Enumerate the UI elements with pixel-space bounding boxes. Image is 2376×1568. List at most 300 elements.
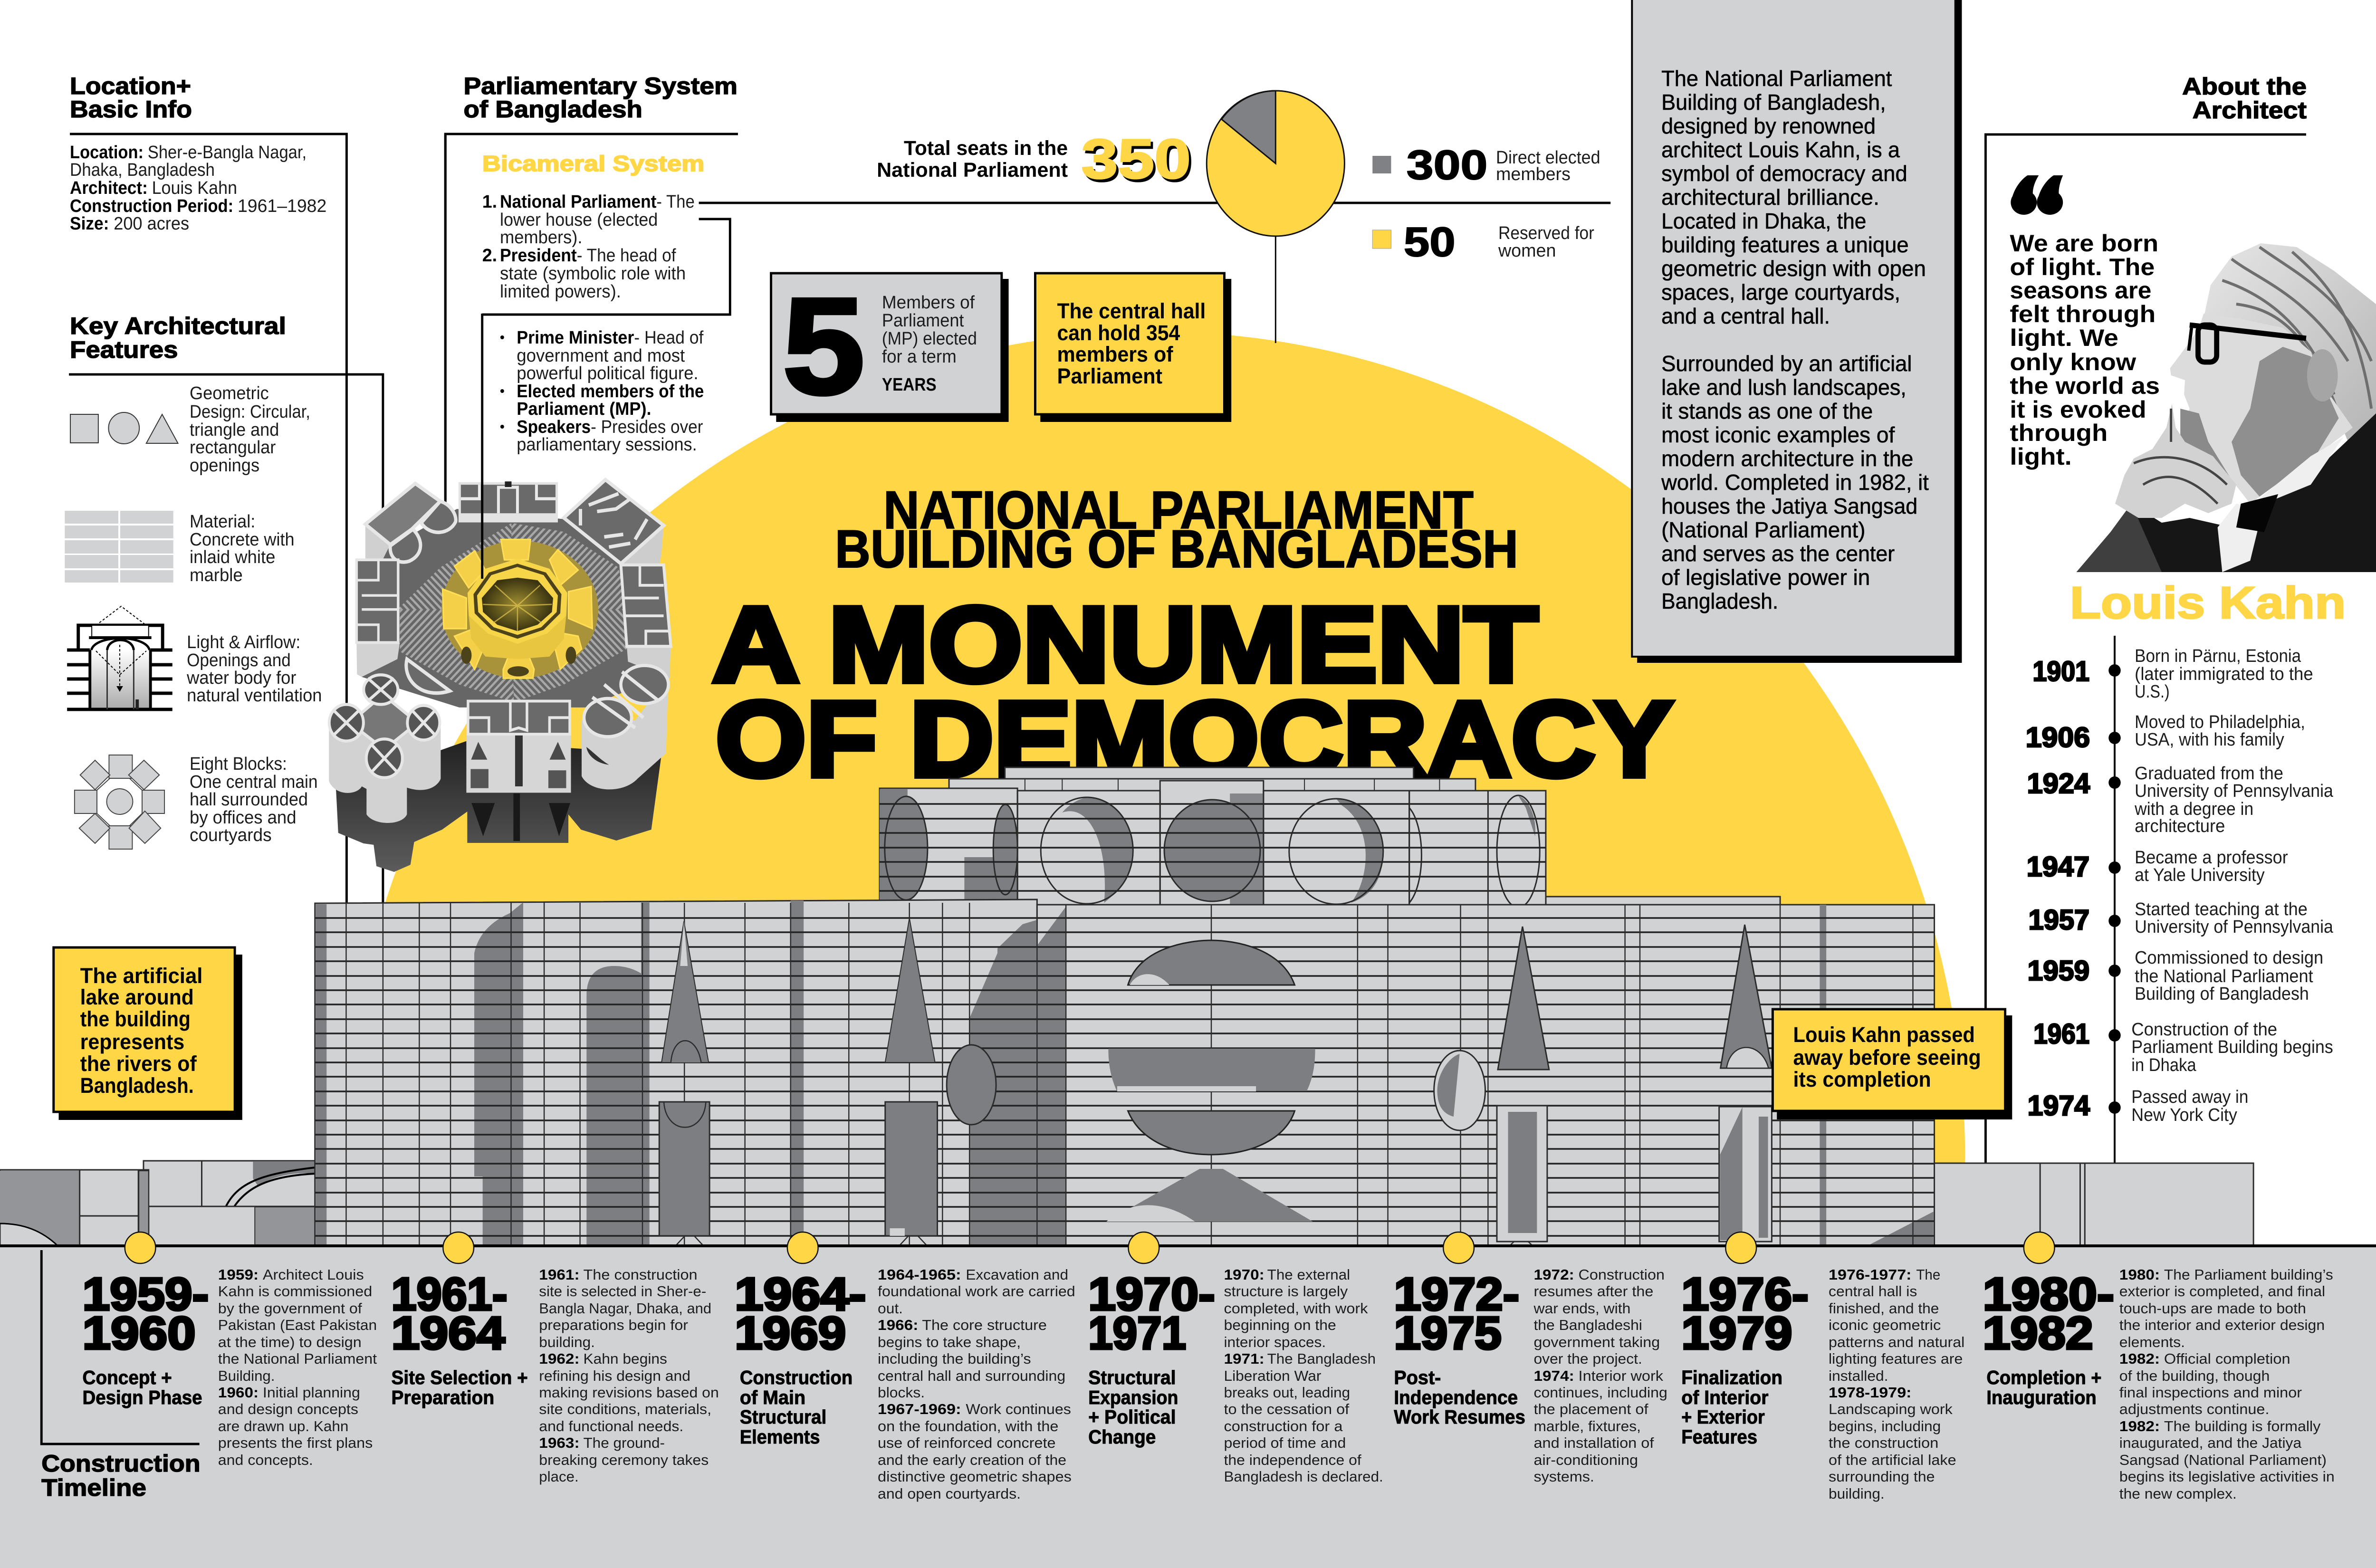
callout: central hall (1035, 273, 1231, 422)
numbered list: houses: members). (500, 227, 582, 247)
phase: 1964-1969: on the foundation, with the (878, 1418, 1058, 1434)
numbered list: houses: state (symbolic role with (500, 263, 686, 283)
phase: 1964-1969: and the early creation of the (878, 1452, 1066, 1468)
phase: 1961-1964: 1962: (539, 1350, 580, 1367)
location facts: Sher-e-Bangla Nagar, (148, 142, 307, 162)
numbered list: houses: - The (656, 191, 695, 211)
numbered list: houses: 2. (482, 245, 497, 265)
timeline heading (41, 1451, 201, 1501)
panel: description: architect Louis Kahn, is a (1661, 138, 1900, 162)
text: light and airflow (186, 632, 322, 705)
connector frame: features (69, 374, 383, 903)
numbered list: houses: - The head of (577, 245, 676, 265)
phase: 1964-1969: and open courtyards. (878, 1485, 1021, 1502)
title: a monument of democracy: OF DEMOCRACY (716, 679, 1673, 799)
text: geometric design: rectangular (190, 437, 276, 457)
phase: 1964-1969: begins to take shape, (878, 1334, 1021, 1350)
phase: 1964-1969: 1967-1969: (878, 1401, 961, 1417)
biography entries: in Dhaka (2131, 1055, 2196, 1075)
biography entries: Parliament Building begins (2131, 1037, 2333, 1057)
phase: 1964-1969 (735, 1266, 1075, 1502)
phase: 1964-1969: 1966: (878, 1317, 918, 1333)
phase: 1972-1975: war ends, with (1533, 1300, 1630, 1317)
phase: 1964-1969: out. (878, 1300, 903, 1317)
phase: 1980-1982: Official completion (2164, 1350, 2290, 1367)
heading: location: Location+ (70, 73, 191, 99)
quote text: felt through (2010, 301, 2156, 327)
panel: location and basic info (70, 73, 346, 903)
numbered list: houses: National Parliament (500, 191, 657, 211)
phase: 1961-1964: place. (539, 1468, 579, 1485)
seat total label (877, 137, 1068, 182)
connector: parliament to central hall (481, 314, 483, 579)
right low wing (1934, 1163, 2253, 1246)
panel: description: and serves as the center (1661, 542, 1895, 566)
phase: 1976-1979 (1681, 1266, 1964, 1502)
phase: 1980-1982: Inauguration (1986, 1386, 2097, 1408)
phase: 1972-1975: resumes after the (1533, 1283, 1653, 1300)
phase: 1976-1979: 1976- (1681, 1269, 1809, 1320)
phase: 1959-1960: Kahn is commissioned (218, 1283, 372, 1300)
block top right (564, 479, 664, 567)
phase: 1980-1982: 1982 (1983, 1308, 2093, 1359)
panel: description: of legislative power in (1661, 565, 1870, 590)
callout: artificial lake: represents (80, 1031, 184, 1054)
text: eight blocks: One central main (190, 772, 318, 792)
phase: 1972-1975: 1972: (1533, 1266, 1574, 1283)
callout: five year term: for a term (882, 346, 957, 366)
callout: Kahn passed away: away before seeing (1793, 1046, 1981, 1070)
quote text: light. We (2010, 325, 2118, 351)
panel: description: The National Parliament (1661, 67, 1892, 91)
panel: parliamentary system (445, 73, 738, 504)
text: material: Material: (190, 511, 255, 531)
bulleted list: roles: Elected members of the (517, 381, 704, 401)
callout: five year term: 5 (783, 270, 865, 423)
location facts: Dhaka, Bangladesh (70, 160, 215, 180)
heading: parliamentary system: Parliamentary System (463, 73, 738, 99)
timeline heading: Timeline (41, 1475, 146, 1501)
phase: 1964-1969: Structural (740, 1406, 826, 1428)
phase: 1970-1971: 1971 (1088, 1308, 1186, 1359)
biography years: 1974 (2028, 1090, 2090, 1121)
phase: 1972-1975: 1974: (1533, 1367, 1574, 1384)
callout: Kahn passed away: its completion (1793, 1068, 1931, 1091)
numbered list: houses: lower house (elected (500, 210, 658, 229)
phase: 1959-1960: at the time) to design (218, 1334, 362, 1350)
callout: artificial lake: Bangladesh. (80, 1074, 194, 1098)
phase: 1961-1964 (392, 1266, 719, 1485)
phase: 1980-1982: 1982: (2119, 1418, 2160, 1434)
callout: central hall: members of (1057, 343, 1173, 366)
numbered list: houses: limited powers). (500, 281, 621, 301)
bulleted list: roles (500, 327, 704, 454)
callout: central hall: The central hall (1057, 300, 1206, 323)
text: material (190, 511, 295, 585)
phase: 1976-1979: building. (1829, 1485, 1885, 1502)
phase: 1976-1979: the construction (1829, 1434, 1938, 1451)
biography years: 1947 (2027, 851, 2089, 882)
phase: 1970-1971: interior spaces. (1224, 1334, 1326, 1350)
numbered list: houses: President (500, 245, 577, 265)
text: light and airflow: water body for (186, 668, 297, 688)
phase: 1976-1979: iconic geometric (1829, 1317, 1941, 1333)
location facts (70, 142, 326, 233)
phase: 1972-1975: Post- (1394, 1367, 1441, 1388)
phase: 1964-1969: Construction (740, 1367, 853, 1388)
biography entries: (later immigrated to the (2135, 664, 2313, 684)
phase: 1972-1975: air-conditioning (1533, 1452, 1638, 1468)
bulleted list: roles: powerful political figure. (517, 363, 699, 383)
phase: 1959-1960: Initial planning (263, 1384, 360, 1401)
location facts: 200 acres (114, 213, 189, 233)
phase: 1964-1969: 1964-1965: (878, 1266, 961, 1283)
yellow sun backdrop (345, 332, 1965, 1254)
phase: 1961-1964: preparations begin for (539, 1317, 688, 1333)
phase: 1972-1975: the Bangladeshi (1533, 1317, 1642, 1333)
numbered list: houses: 1. (482, 191, 497, 211)
phase: 1980-1982: the new complex. (2119, 1485, 2237, 1502)
phase: 1964-1969: Elements (740, 1426, 820, 1448)
upper tower (880, 767, 1780, 911)
phase: 1959-1960: are drawn up. Kahn (218, 1418, 348, 1434)
legend: 300 direct seats: 300 (1407, 142, 1487, 188)
phase: 1961-1964: The ground- (583, 1434, 665, 1451)
subheading: bicameral system: Bicameral System (482, 152, 704, 176)
phase: 1964-1969: Work continues (966, 1401, 1071, 1417)
title: a monument of democracy (712, 585, 1673, 799)
reflection details (471, 794, 570, 841)
text: eight blocks: hall surrounded (190, 789, 308, 809)
phase: 1961-1964: refining his design and (539, 1367, 690, 1384)
heading: about the architect (2182, 74, 2307, 124)
quote text: We are born (2010, 230, 2158, 257)
block top left (365, 483, 456, 562)
location facts: Louis Kahn (152, 178, 237, 198)
biography years: 1906 (2026, 722, 2090, 753)
panel: description: Bangladesh. (1661, 589, 1778, 613)
timeline heading bracket (41, 1250, 200, 1444)
legend: 50 reserved seats: 50 (1404, 219, 1456, 265)
phase: 1961-1964: 1963: (539, 1434, 580, 1451)
seat total label: Total seats in the (904, 137, 1068, 160)
phase: 1964-1969: of Main (740, 1386, 805, 1408)
legend: 50 reserved seats (1372, 219, 1594, 265)
phase: 1959-1960: by the government of (218, 1300, 362, 1317)
timeline heading: Construction (41, 1451, 201, 1477)
phase: 1980-1982: exterior is completed, and final (2119, 1283, 2325, 1300)
phase: 1964-1969: foundational work are carried (878, 1283, 1075, 1300)
phase: 1959-1960: and design concepts (218, 1401, 358, 1417)
panel: construction timeline (0, 1232, 2376, 1568)
phase: 1976-1979: The (1916, 1266, 1940, 1283)
panel: description (1631, 0, 1962, 663)
phase: 1970-1971: Liberation War (1224, 1367, 1321, 1384)
phase: 1972-1975: Interior work (1579, 1367, 1664, 1384)
phase: 1976-1979: of the artificial lake (1829, 1452, 1956, 1468)
phase: 1970-1971: to the cessation of (1224, 1401, 1350, 1417)
phase: 1972-1975: government taking (1533, 1334, 1660, 1350)
callout: Kahn passed away (1772, 1009, 2012, 1119)
panel: description: world. Completed in 1982, it (1661, 470, 1929, 495)
seat total label: National Parliament (877, 159, 1068, 182)
phase: 1980-1982: Sangsad (National Parliament) (2119, 1452, 2327, 1468)
phase: 1980-1982: adjustments continue. (2119, 1401, 2269, 1417)
biography entries: Construction of the (2131, 1019, 2277, 1039)
bulleted list: roles: parliamentary sessions. (517, 434, 697, 454)
biography years: 1961 (2033, 1018, 2089, 1050)
legend: 300 direct seats: Direct elected (1496, 147, 1600, 167)
phase: 1961-1964: site conditions, materials, (539, 1401, 711, 1417)
heading: parliamentary system (463, 73, 738, 123)
callout: central hall: can hold 354 (1057, 322, 1180, 345)
phase: 1976-1979: central hall is (1829, 1283, 1917, 1300)
phase: 1964-1969: central hall and surrounding (878, 1367, 1065, 1384)
phase: 1970-1971: construction for a (1224, 1418, 1343, 1434)
phase: 1959-1960: 1960 (83, 1308, 196, 1359)
text: eight blocks: by offices and (190, 807, 297, 827)
phase: 1980-1982: final inspections and minor (2119, 1384, 2302, 1401)
name: Louis Kahn: Louis Kahn (2070, 577, 2346, 628)
block left (356, 560, 400, 677)
text: light and airflow: Light & Airflow: (187, 632, 300, 652)
phase: 1970-1971: 1971: (1224, 1350, 1265, 1367)
phase: 1970-1971: Bangladesh is declared. (1224, 1468, 1383, 1485)
phase: 1976-1979: Features (1681, 1426, 1757, 1448)
text: light and airflow: Openings and (187, 650, 291, 670)
numbered list: houses (482, 191, 695, 301)
phase: 1961-1964: breaking ceremony takes (539, 1452, 709, 1468)
phase: 1964-1969: use of reinforced concrete (878, 1434, 1056, 1451)
biography entries: U.S.) (2135, 681, 2170, 701)
phase: 1961-1964: 1961: (539, 1266, 580, 1283)
phase: 1961-1964: and functional needs. (539, 1418, 683, 1434)
phase: 1970-1971: Expansion (1088, 1386, 1178, 1408)
biography entries: the National Parliament (2135, 966, 2313, 986)
phase: 1972-1975 (1394, 1266, 1667, 1485)
phase: 1972-1975: Independence (1394, 1386, 1518, 1408)
phase: 1972-1975: continues, including (1533, 1384, 1667, 1401)
heading: location: Basic Info (70, 96, 192, 123)
biography years (2026, 656, 2090, 1121)
text: geometric design: triangle and (190, 420, 279, 440)
biography entries: USA, with his family (2135, 729, 2284, 749)
heading: features (70, 313, 286, 363)
biography years: 1957 (2029, 904, 2089, 936)
biography entries: New York City (2131, 1105, 2237, 1125)
phase: 1961-1964: making revisions based on (539, 1384, 719, 1401)
panel: description: geometric design with open (1661, 257, 1926, 281)
phase: 1972-1975: over the project. (1533, 1350, 1642, 1367)
text: geometric design (190, 383, 310, 475)
phase: 1964-1969: Excavation and (966, 1266, 1068, 1283)
block top (459, 481, 558, 522)
phase: 1976-1979: + Exterior (1681, 1406, 1765, 1428)
quote text: it is evoked (2010, 397, 2146, 423)
icon: quotation mark (2011, 175, 2063, 215)
connector frame: architect (1985, 134, 2306, 1164)
connector: seats line (699, 201, 1610, 204)
quote text: through (2010, 420, 2108, 446)
callout: artificial lake: the rivers of (80, 1052, 197, 1076)
phase: 1980-1982: begins its legislative activities in (2119, 1468, 2335, 1485)
phase: 1970-1971: beginning on the (1224, 1317, 1336, 1333)
phase: 1970-1971: + Political (1088, 1406, 1176, 1428)
bulleted list: roles: Speakers (517, 417, 591, 437)
panel: description: modern architecture in the (1661, 447, 1913, 471)
phase: 1961-1964: The construction (583, 1266, 698, 1283)
title: national parliament building: BUILDING OF BANGLADESH (835, 519, 1518, 579)
phase: 1980-1982: touch-ups are made to both (2119, 1300, 2306, 1317)
biography entries: University of Pennsylvania (2135, 781, 2333, 801)
panel: description: and a central hall. (1661, 304, 1830, 328)
callout: five year term: (MP) elected (882, 328, 977, 348)
legend: 50 reserved seats: Reserved for (1498, 223, 1594, 243)
phase: 1976-1979: Finalization (1681, 1367, 1782, 1388)
biography entries: Building of Bangladesh (2135, 984, 2309, 1004)
phase: 1961-1964: Kahn begins (583, 1350, 667, 1367)
biography entries: University of Pennsylvania (2135, 917, 2333, 937)
phase: 1959-1960: Architect Louis (263, 1266, 364, 1283)
phase: 1970-1971: completed, with work (1224, 1300, 1368, 1317)
panel: description: symbol of democracy and (1661, 162, 1907, 186)
window shapes (659, 918, 1772, 1246)
text: material: inlaid white (190, 547, 275, 567)
icon: eight blocks plan (75, 755, 164, 849)
phase: 1970-1971: Change (1088, 1426, 1156, 1448)
phase: 1964-1969: 1964- (735, 1269, 866, 1320)
panel: about the architect (1985, 74, 2376, 1164)
bulleted list: roles: - Presides over (591, 417, 703, 437)
biography entries: architecture (2135, 816, 2225, 836)
legend: 300 direct seats: members (1496, 164, 1571, 184)
biography years: 1959 (2028, 955, 2089, 986)
biography entries: Passed away in (2131, 1087, 2248, 1107)
panel: description: houses the Jatiya Sangsad (1661, 494, 1917, 518)
phase: 1980-1982: 1982: (2119, 1350, 2160, 1367)
phase: 1970-1971: the independence of (1224, 1452, 1361, 1468)
phase: 1970-1971: The Bangladesh (1267, 1350, 1376, 1367)
phase: 1980-1982: Completion + (1986, 1367, 2102, 1388)
heading: parliamentary system: of Bangladesh (463, 96, 642, 123)
callout: five year term: Members of (882, 292, 975, 312)
phase: 1959-1960: 1960: (218, 1384, 259, 1401)
biography years: 1901 (2032, 656, 2089, 687)
legend: 50 reserved seats: women (1498, 240, 1556, 260)
biography entries (2131, 646, 2333, 1125)
panel: description: Surrounded by an artificial (1661, 352, 1912, 376)
aerial plan (329, 479, 671, 823)
panel: description: designed by renowned (1661, 114, 1876, 138)
phase: 1970-1971: Structural (1088, 1367, 1176, 1388)
callout: artificial lake: lake around (80, 986, 194, 1009)
phase: 1961-1964: building. (539, 1334, 595, 1350)
text: eight blocks: Eight Blocks: (190, 754, 287, 774)
callout: Kahn passed away: Louis Kahn passed (1793, 1023, 1975, 1047)
quote text: of light. The (2010, 254, 2155, 280)
text: eight blocks: courtyards (190, 825, 272, 845)
phase: 1972-1975: 1972- (1394, 1269, 1519, 1320)
phase: 1970-1971: structure is largely (1224, 1283, 1348, 1300)
title: national parliament building (835, 480, 1518, 579)
phase: 1964-1969: distinctive geometric shapes (878, 1468, 1072, 1485)
quote text: light. (2010, 444, 2072, 470)
quote text: the world as (2010, 373, 2160, 399)
panel: description: building features a unique (1661, 233, 1909, 257)
phase: 1964-1969: including the building’s (878, 1350, 1031, 1367)
bulleted list: roles: - Head of (634, 327, 704, 347)
connector frame: parliamentary (445, 134, 738, 504)
phase: 1980-1982 (1983, 1266, 2335, 1502)
illustration: isometric building with reflection (329, 479, 671, 872)
callout: five year term: Parliament (882, 310, 964, 330)
phase: 1961-1964: site is selected in Sher-e- (539, 1283, 706, 1300)
bulleted list: roles: Parliament (MP). (517, 399, 651, 419)
phase: 1972-1975: marble, fixtures, (1533, 1418, 1641, 1434)
heading: features: Key Architectural (70, 313, 286, 339)
icon: concrete and marble panels (65, 511, 173, 583)
callout: five year term: YEARS (882, 374, 937, 394)
icon: basic shapes (70, 412, 178, 444)
phase: 1964-1969: The core structure (922, 1317, 1047, 1333)
phase: 1980-1982: The building is formally (2164, 1418, 2321, 1434)
phase: 1970-1971: The external (1267, 1266, 1350, 1283)
phase: 1959-1960: and concepts. (218, 1452, 313, 1468)
location facts: Size: (70, 213, 109, 233)
text: eight blocks (190, 754, 318, 845)
biography years: 1924 (2027, 768, 2090, 799)
heading: about the architect: Architect (2193, 97, 2307, 124)
heading: location (70, 73, 192, 123)
block bottom (466, 701, 571, 793)
phase: 1972-1975: Construction (1579, 1266, 1665, 1283)
bulleted list: roles: government and most (517, 345, 685, 365)
connector stub (444, 134, 447, 500)
callout: artificial lake: the building (80, 1008, 191, 1031)
water reflection (336, 741, 661, 872)
phase: 1976-1979: 1976-1977: (1829, 1266, 1912, 1283)
quote text: only know (2010, 349, 2136, 375)
phase: 1970-1971: breaks out, leading (1224, 1384, 1350, 1401)
biography entries: Graduated from the (2135, 763, 2283, 783)
phase: 1959-1960: Concept + (83, 1367, 172, 1388)
phase: 1961-1964: Site Selection + (392, 1367, 528, 1388)
phase: 1959-1960: presents the first plans (218, 1434, 373, 1451)
connector frame: location (70, 134, 346, 903)
title: national parliament building: NATIONAL PARLIAMENT (883, 480, 1474, 540)
phase: 1961-1964: 1961- (392, 1269, 508, 1320)
callout: artificial lake: The artificial (80, 965, 202, 988)
phase: 1959-1960: Design Phase (83, 1386, 202, 1408)
quote text: seasons are (2010, 277, 2151, 304)
phase: 1959-1960: Building. (218, 1367, 275, 1384)
panel: description: Building of Bangladesh, (1661, 90, 1886, 115)
phase: 1976-1979: 1979 (1681, 1308, 1792, 1359)
panel: description: lake and lush landscapes, (1661, 375, 1907, 400)
text: light and airflow: natural ventilation (187, 685, 322, 705)
central geometric openings (1106, 940, 1315, 1222)
location facts: Construction Period: (70, 196, 233, 216)
phase: 1980-1982: 1980- (1983, 1269, 2114, 1320)
phase: 1970-1971: 1970- (1088, 1269, 1215, 1320)
heading: about the architect: About the (2182, 74, 2307, 100)
timeline axis (0, 1244, 2376, 1247)
block corner cylinders (329, 675, 441, 823)
phase: 1972-1975: 1975 (1394, 1308, 1502, 1359)
legend: 300 direct seats (1372, 142, 1600, 188)
biography timeline axis (2108, 636, 2121, 1164)
phase: 1970-1971: 1970: (1224, 1266, 1265, 1283)
